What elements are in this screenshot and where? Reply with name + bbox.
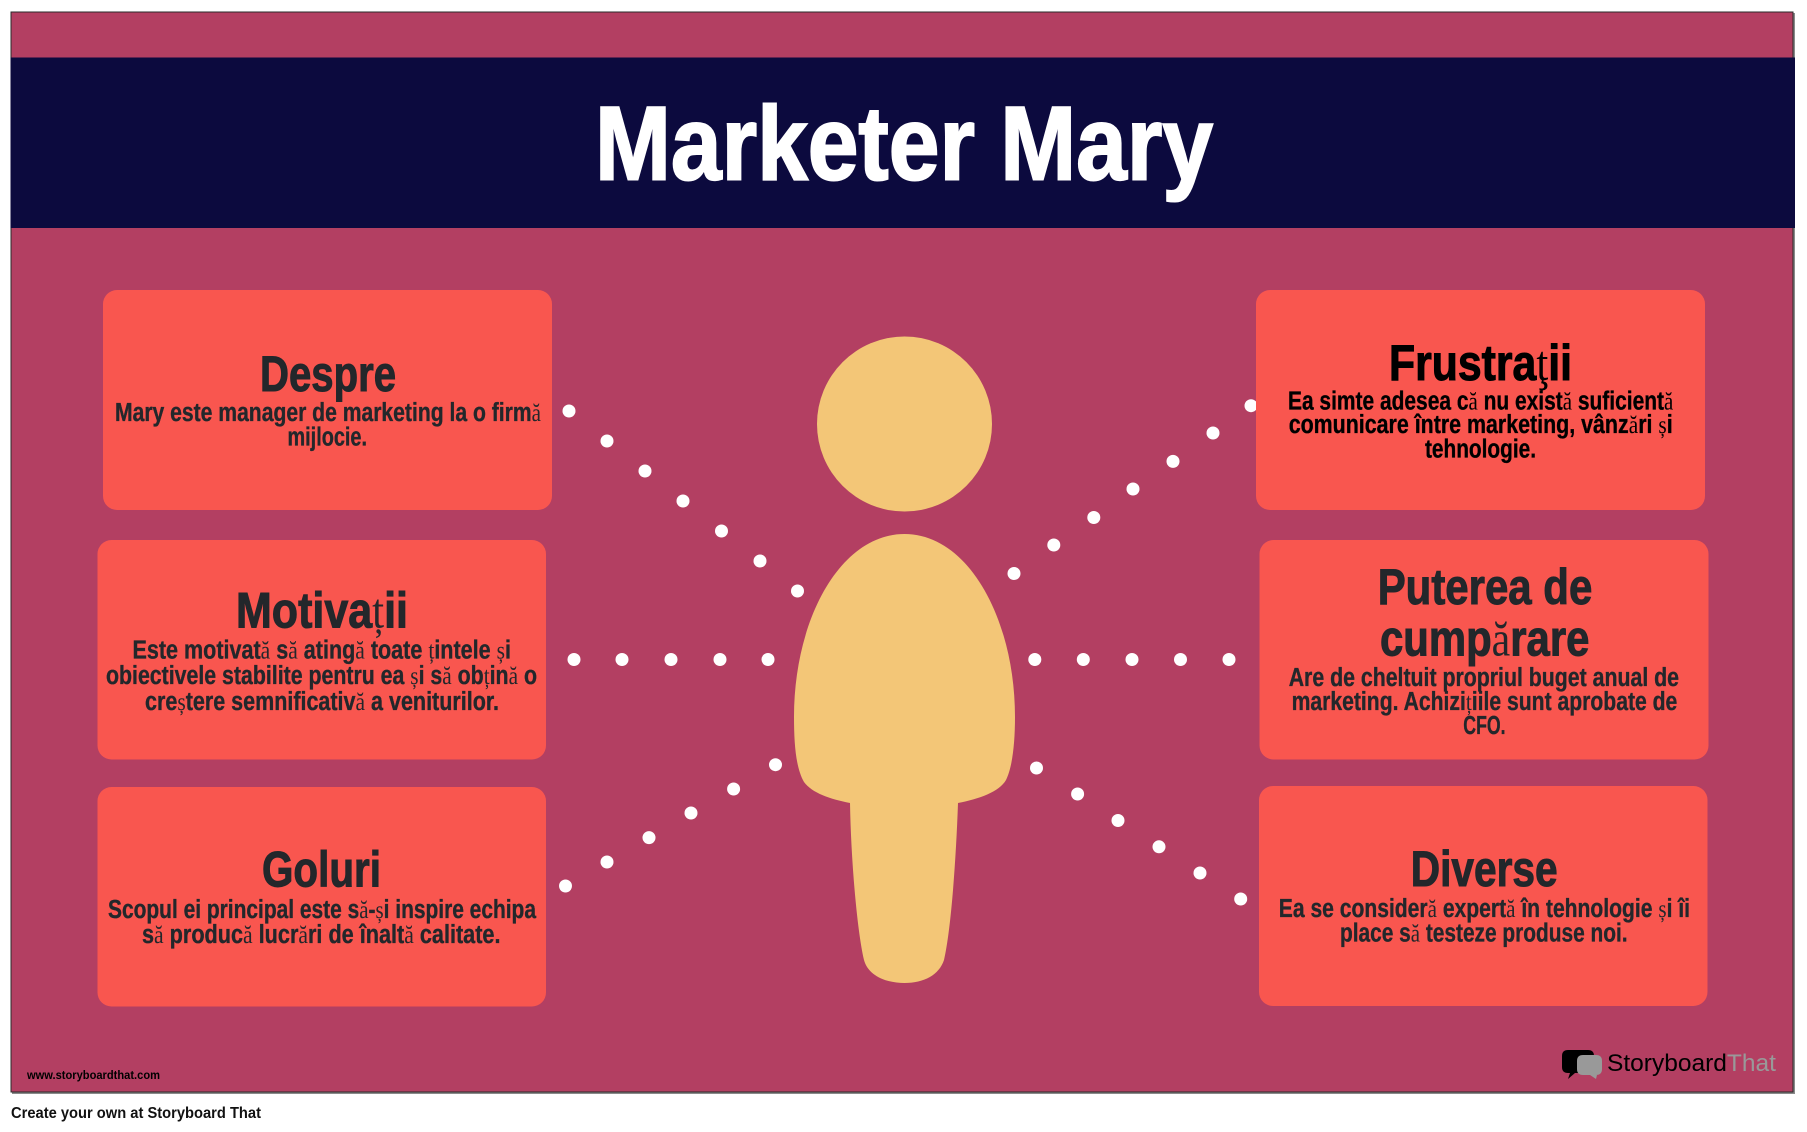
- body text: Frustrații: [1288, 386, 1673, 464]
- dotted connector: upper right: [1008, 399, 1258, 580]
- body text: Motivații: [106, 636, 537, 716]
- body text: Frustrații: Ea simte adesea că nu există suficientă: [1288, 386, 1673, 416]
- icon: person silhouette: [794, 336, 1015, 983]
- body text: Motivații: Este motivată să atingă toate țintele și: [132, 636, 511, 664]
- footer caption: Create your own at Storyboard That: [11, 1105, 261, 1122]
- body text: Diverse: place să testeze produse noi.: [1340, 918, 1628, 948]
- body text: Puterea de cumpărare: [1289, 664, 1679, 740]
- dotted connector: middle right: [1028, 653, 1236, 666]
- dotted connector: lower left: [559, 758, 782, 892]
- body text: Motivații: creștere semnificativă a veniturilor.: [145, 687, 499, 716]
- dotted connector: middle left: [568, 653, 774, 666]
- title banner: [10, 58, 1795, 228]
- title: Marketer Mary: [595, 86, 1213, 202]
- body text: Goluri: [108, 895, 537, 949]
- dotted connector: upper left: [562, 404, 804, 598]
- website credit: www.storyboardthat.com: [26, 1068, 160, 1082]
- heading: Puterea de cumpărare: [1378, 559, 1592, 666]
- heading: Goluri: Goluri: [262, 842, 381, 898]
- body text: Puterea de cumpărare: marketing. Achizițiile sunt aprobate de: [1292, 687, 1677, 716]
- heading: Puterea de cumpărare: cumpărare: [1380, 610, 1589, 666]
- panel: Puterea de cumpărare: [1260, 540, 1708, 760]
- dotted connector: lower right: [1030, 762, 1247, 906]
- panel: Goluri: [98, 787, 546, 1006]
- heading: Puterea de cumpărare: Puterea de: [1378, 559, 1592, 615]
- panel: Frustrații: [1256, 290, 1705, 510]
- icon: speech bubbles: [1562, 1050, 1602, 1079]
- body text: Despre: [115, 398, 541, 452]
- panel: Despre: [103, 290, 552, 510]
- body text: Puterea de cumpărare: CFO.: [1463, 712, 1506, 740]
- logo wordmark: StoryboardThat: [1607, 1050, 1776, 1077]
- heading: Diverse: Diverse: [1411, 841, 1558, 897]
- body text: Goluri: Scopul ei principal este să-și inspire echipa: [108, 895, 537, 924]
- body text: Frustrații: tehnologie.: [1425, 436, 1536, 464]
- body text: Motivații: obiectivele stabilite pentru ea și să obțină o: [106, 661, 537, 690]
- heading: Despre: Despre: [260, 346, 396, 402]
- logo: Storyboard That: [1562, 1050, 1776, 1079]
- heading: Frustrații: Frustraţii: [1389, 335, 1572, 391]
- body text: Goluri: să producă lucrări de înaltă calitate.: [142, 920, 500, 949]
- body text: Puterea de cumpărare: Are de cheltuit propriul buget anual de: [1289, 664, 1679, 692]
- body text: Frustrații: comunicare între marketing, vânzări și: [1289, 410, 1673, 439]
- heading: Motivații: Motivații: [236, 582, 408, 638]
- body text: Diverse: [1279, 894, 1690, 948]
- body text: Despre: Mary este manager de marketing la o firmă: [115, 398, 541, 427]
- panel: Diverse: [1259, 786, 1708, 1006]
- body text: Diverse: Ea se consideră expertă în tehnologie și îi: [1279, 894, 1690, 923]
- panel: Motivații: [98, 540, 546, 760]
- body text: Despre: mijlocie.: [288, 424, 367, 452]
